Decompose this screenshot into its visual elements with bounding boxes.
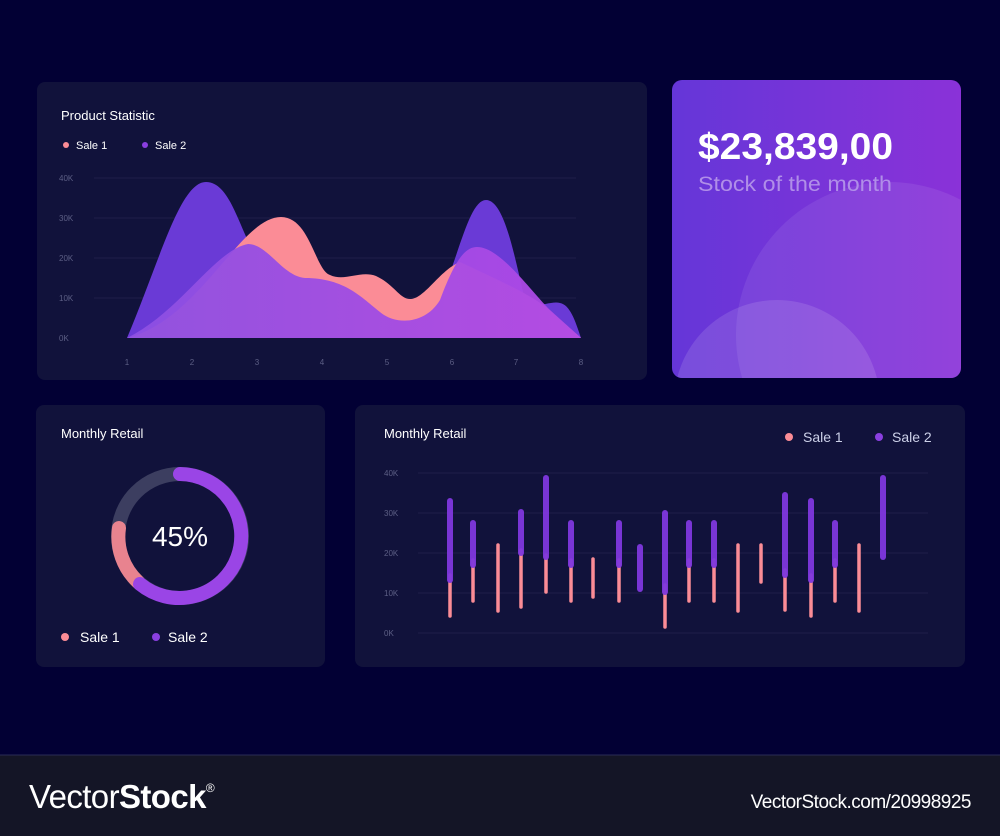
legend: donut: Sale 1 <box>80 629 120 645</box>
stock label: Stock of the month <box>698 173 892 196</box>
area chart: 40K <box>59 174 74 183</box>
bar chart <box>384 469 928 638</box>
bar chart: 0K <box>384 629 394 638</box>
legend: bars: Sale 1 <box>803 429 843 445</box>
area chart: 4 <box>320 358 325 367</box>
donut chart <box>118 474 242 598</box>
donut value: 45% <box>152 521 208 552</box>
area chart: 6 <box>450 358 455 367</box>
bar chart: 20K <box>384 549 399 558</box>
panel: monthly retail bars <box>355 405 965 667</box>
panel: stock of the month <box>672 80 961 378</box>
area chart <box>59 174 584 367</box>
area chart: 30K <box>59 214 74 223</box>
area chart: 0K <box>59 334 69 343</box>
legend: area chart <box>63 140 186 152</box>
heading: monthly retail: Monthly Retail <box>61 426 143 441</box>
area chart: 20K <box>59 254 74 263</box>
area chart: 1 <box>125 358 130 367</box>
legend: bars: Sale 2 <box>892 429 932 445</box>
area chart: 7 <box>514 358 519 367</box>
footer logo: VectorStock <box>29 778 206 815</box>
legend: area chart: Sale 2 <box>155 140 186 152</box>
footer <box>0 755 1000 836</box>
panel: product statistic <box>37 82 647 380</box>
area chart: 8 <box>579 358 584 367</box>
heading: product statistic: Product Statistic <box>61 108 155 123</box>
legend: donut <box>61 629 208 645</box>
area chart: 3 <box>255 358 260 367</box>
area chart: 2 <box>190 358 195 367</box>
legend: area chart: Sale 1 <box>76 140 107 152</box>
bar chart: 10K <box>384 589 399 598</box>
footer url: VectorStock.com/20998925 <box>751 792 971 813</box>
bar chart: 30K <box>384 509 399 518</box>
heading: monthly retail bars: Monthly Retail <box>384 426 466 441</box>
panel: monthly retail donut <box>36 405 325 667</box>
legend: donut: Sale 2 <box>168 629 208 645</box>
bar chart: 40K <box>384 469 399 478</box>
footer logo: ® <box>206 781 215 795</box>
legend: bars <box>785 429 932 445</box>
stock value: $23,839,00 <box>698 126 893 167</box>
area chart: 10K <box>59 294 74 303</box>
area chart: 5 <box>385 358 390 367</box>
